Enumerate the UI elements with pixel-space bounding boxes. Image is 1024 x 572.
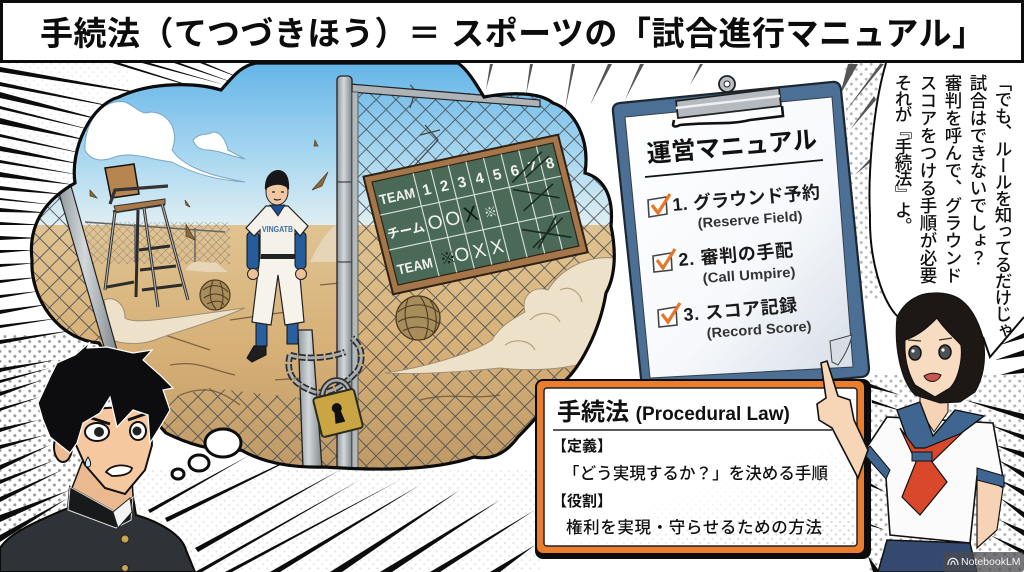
scoreboard header: X — [488, 236, 506, 259]
torn wire — [410, 85, 440, 165]
watermark label: NotebookLM — [961, 556, 1021, 568]
checklist item 3 — [658, 295, 812, 341]
definition label: 【定義】 — [552, 438, 612, 455]
definition panel — [535, 379, 871, 559]
tumbleweed large — [396, 296, 440, 340]
girl eyes — [908, 338, 952, 360]
speech bubble text — [891, 74, 1016, 338]
umpire chair — [105, 164, 188, 307]
panel heading: 手続法 (Procedural Law) — [557, 399, 790, 426]
boy sweat — [85, 457, 91, 467]
jersey lettering: VINGATB — [262, 225, 293, 234]
role label: 【役割】 — [552, 492, 612, 510]
boy face — [76, 405, 152, 494]
clouds — [85, 102, 245, 182]
checklist item 2 — [653, 240, 796, 286]
scoreboard header: 4 — [473, 170, 486, 188]
bent left fence post — [58, 186, 117, 350]
scoreboard — [363, 135, 588, 294]
girl mouth — [924, 373, 941, 382]
scoreboard header: O — [443, 208, 463, 231]
boy mouth — [106, 465, 132, 476]
boy neck — [72, 462, 133, 512]
background fence — [85, 222, 230, 264]
scoreboard header: 7 — [526, 158, 539, 177]
boy hair — [38, 342, 173, 453]
scoreboard header — [378, 158, 554, 274]
scoreboard header: 2 — [438, 177, 451, 195]
scoreboard header: O — [452, 244, 472, 267]
fence top rail — [350, 84, 540, 107]
padlock body — [313, 389, 363, 437]
scoreboard header: 8 — [544, 154, 556, 173]
definition text: 「どう実現するか？」を決める手順 — [563, 464, 828, 483]
scoreboard header: X — [461, 202, 481, 227]
title text: 手続法（てつづきほう）＝ スポーツの「試合進行マニュアル」 — [40, 15, 985, 52]
scoreboard header: チーム — [385, 219, 426, 242]
left chain-link fence — [33, 196, 102, 341]
scoreboard header: TEAM — [378, 184, 417, 208]
baseball player — [246, 170, 308, 362]
speech bubble text: 試合はできないでしょ？ — [966, 74, 991, 266]
chain and padlock — [289, 338, 363, 437]
scoreboard header: O — [426, 211, 445, 235]
clipboard — [613, 76, 869, 397]
title bar — [2, 2, 1022, 62]
girl character — [817, 293, 1004, 572]
clipboard clip — [673, 76, 783, 126]
girl sleeve cuffs — [863, 446, 1004, 487]
boy eyes — [85, 413, 148, 441]
role text: 権利を実現・守らせるための方法 — [566, 518, 822, 537]
cracks in the ground — [150, 282, 500, 405]
girl neck — [920, 390, 948, 432]
tumbleweed small — [200, 280, 230, 310]
girl right arm — [977, 472, 1003, 548]
girl hair back — [896, 293, 984, 403]
scoreboard header: 1 — [421, 181, 433, 199]
girl face — [905, 318, 961, 397]
broken second post — [298, 330, 322, 468]
scoreboard header: 6 — [509, 162, 521, 180]
dust clouds — [104, 222, 620, 374]
girl sailor collar — [897, 402, 984, 455]
lower chain-link fence — [164, 388, 336, 466]
girl shirt — [863, 417, 1004, 543]
girl skirt — [878, 540, 977, 572]
checklist item 1 — [648, 181, 821, 231]
speech bubble — [869, 63, 1024, 357]
checklist item 3: 3. スコア記録 — [683, 295, 798, 325]
boy jacket — [0, 487, 195, 572]
watermark icon — [948, 558, 958, 565]
clipboard heading: 運営マニュアル — [646, 126, 818, 168]
thought cloud with abandoned baseball field — [20, 60, 620, 475]
NotebookLM watermark — [943, 552, 1024, 572]
scoreboard header: ※ — [438, 248, 458, 269]
speech bubble outline — [870, 63, 1024, 357]
checklist item 1: 1. グラウンド予約 — [672, 181, 821, 215]
checklist item 2: 2. 審判の手配 — [678, 240, 794, 270]
page curl — [830, 335, 852, 365]
speech bubble text: スコアをつける手順が必要 — [916, 74, 941, 284]
thought bubbles — [172, 429, 241, 479]
checklist item 1: (Reserve Field) — [697, 208, 803, 231]
scoreboard header: ※ — [482, 204, 499, 221]
speech bubble text: 「でも、ルールを知ってるだけじゃ — [991, 74, 1016, 338]
checklist item 3: (Record Score) — [706, 318, 812, 341]
speech bubble text: 審判を呼んで、グラウンド — [941, 74, 966, 284]
right chain-link fence — [356, 93, 616, 473]
girl pointing arm — [817, 361, 868, 478]
scoreboard header: TEAM — [395, 254, 434, 278]
scoreboard header: X — [471, 240, 489, 263]
boy character — [0, 342, 195, 572]
checklist item 2: (Call Umpire) — [702, 264, 796, 286]
scoreboard header: 5 — [491, 166, 503, 184]
girl scarf — [900, 428, 962, 515]
fence gate post — [337, 76, 358, 472]
scoreboard header: 3 — [456, 173, 468, 192]
speech bubble text: それが『手続法』よ。 — [891, 74, 916, 233]
flying leaves — [90, 140, 328, 240]
